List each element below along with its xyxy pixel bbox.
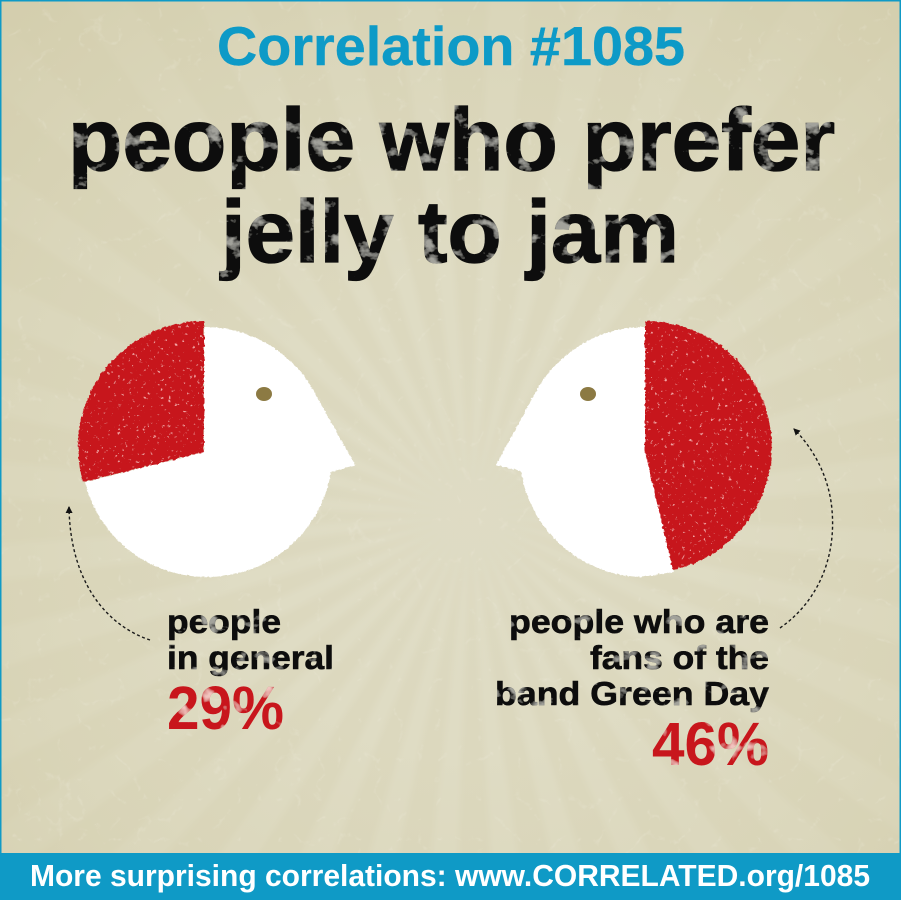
- right eye: [580, 387, 596, 401]
- left eye: [256, 387, 272, 401]
- footer text: More surprising correlations: www.CORRELATED.org/1085: [30, 858, 870, 893]
- left red wedge 29%: [78, 321, 204, 482]
- main title: jelly to jam: [219, 182, 679, 281]
- right head pie chart: Green Day fans 46%: [496, 321, 772, 577]
- right label: fans of the: [590, 639, 769, 676]
- right red wedge 46%: [645, 321, 772, 570]
- arrow: left label to left pie: [69, 507, 150, 640]
- head silhouette right: [496, 327, 674, 577]
- main title: people who prefer: [68, 90, 835, 189]
- left label: in general: [167, 639, 334, 676]
- left head pie chart: people in general 29%: [78, 321, 355, 577]
- right label: [495, 603, 770, 712]
- main title: [68, 90, 835, 281]
- left label: people: [167, 603, 281, 640]
- correlation number heading: Correlation #1085: [217, 15, 685, 77]
- right percentage: 46%: [652, 710, 769, 778]
- head silhouette left: [85, 327, 355, 577]
- right label: band Green Day: [495, 675, 770, 712]
- left percentage: 29%: [167, 674, 284, 742]
- arrow: right label to right pie: [780, 429, 833, 628]
- footer band: [0, 853, 901, 900]
- left label: [167, 603, 334, 676]
- right label: people who are: [509, 603, 769, 640]
